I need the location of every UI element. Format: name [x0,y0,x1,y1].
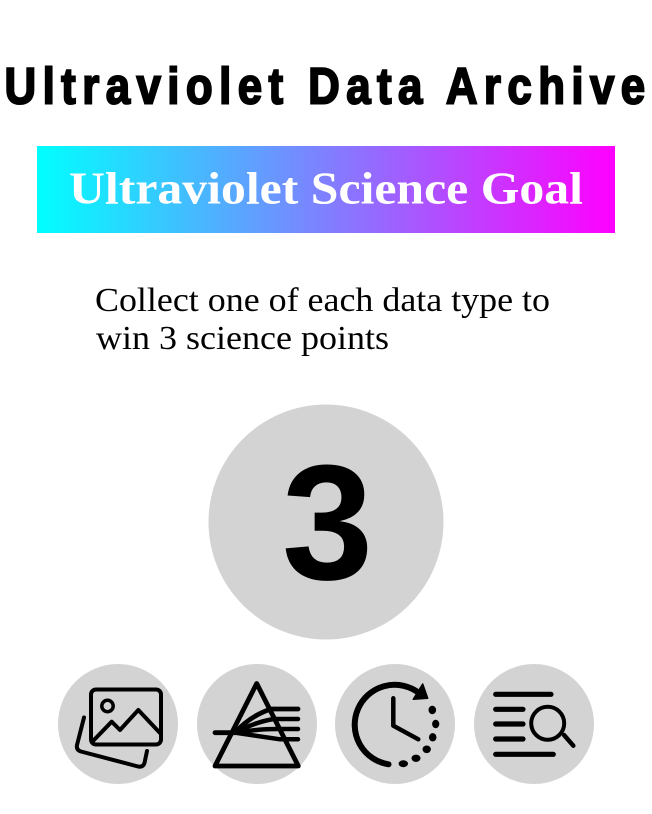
points number: 3 [282,431,373,614]
title: Ultraviolet Data Archive [4,58,645,115]
icon: catalog search data type [474,664,594,784]
points badge: 3 [208,404,444,640]
icon: time series data type [335,664,455,784]
instruction text: win 3 science points [96,320,389,357]
banner: Ultraviolet Science Goal [37,146,615,233]
icon: prism spectroscopy data type [197,664,317,784]
icon: images data type [58,664,178,784]
banner heading: Ultraviolet Science Goal [69,162,583,214]
instruction text: Collect one of each data type to [95,282,550,319]
instruction text [95,282,550,357]
